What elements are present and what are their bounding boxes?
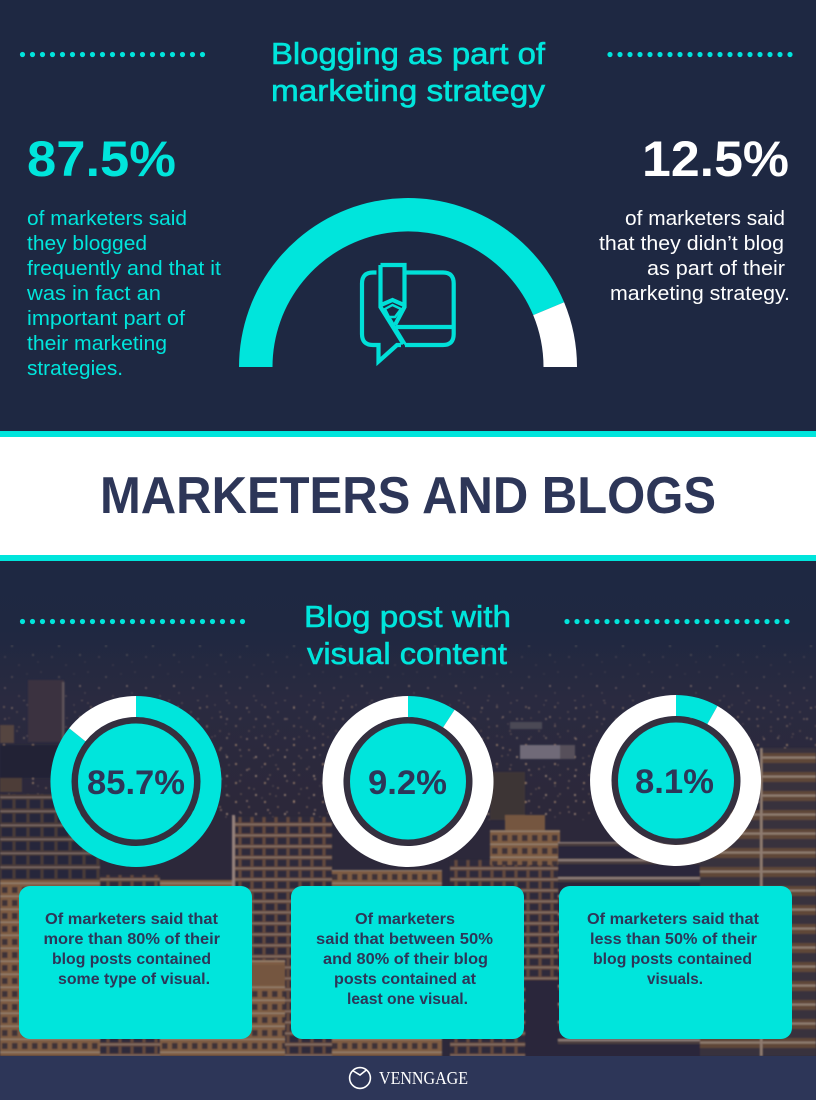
heading: MARKETERS AND BLOGS: MARKETERS AND BLOGS (100, 467, 716, 525)
heading: Blogging as part of marketing strategy (271, 36, 546, 108)
text block: bloggers description: of marketers said (27, 208, 187, 230)
text block: bloggers description (26, 208, 221, 380)
heading: Blogging as part of marketing strategy: marketing strategy (271, 73, 546, 108)
brand name: VENNGAGE (379, 1068, 468, 1088)
text block: non-bloggers description: that they didn’t blog (599, 233, 784, 255)
text block: bloggers description: was in fact an (26, 283, 161, 305)
dotted divider: bottom right (567, 619, 788, 624)
text block: non-bloggers description: of marketers said (625, 208, 785, 230)
statistic: 12.5%: 12.5% (642, 131, 789, 187)
text block: bloggers description: they blogged (27, 233, 147, 255)
dotted divider: top left (22, 52, 203, 57)
chart: donut 9.2% (323, 696, 494, 867)
value: 8.1%: 8.1% (635, 763, 714, 801)
card: less than 50%: Of marketers said that (587, 911, 759, 928)
icon: Venngage logo (350, 1068, 370, 1088)
heading: Blogging as part of marketing strategy: Blogging as part of (271, 36, 545, 71)
chart: donut 8.1% (590, 695, 761, 866)
card: between 50% and 80% (291, 886, 524, 1039)
text block: non-bloggers description: marketing strategy. (610, 283, 790, 305)
chart: semicircle gauge 87.5 / 12.5 (239, 198, 577, 367)
text block: bloggers description: frequently and that it (27, 258, 221, 280)
card: less than 50% (559, 886, 792, 1039)
card: between 50% and 80%: said that between 50% (316, 931, 493, 948)
card: between 50% and 80%: posts contained at (334, 971, 476, 988)
background: night city skyline (0, 561, 816, 1056)
card: between 50% and 80%: and 80% of their blog (323, 951, 488, 968)
text block: non-bloggers description (599, 208, 790, 305)
card: between 50% and 80%: Of marketers (355, 911, 455, 928)
top panel background (0, 0, 816, 432)
dotted divider: top right (610, 52, 791, 57)
heading: Blog post with visual content (304, 599, 511, 671)
card: more than 80%: blog posts contained (52, 951, 211, 968)
heading: Blog post with visual content: Blog post with (304, 599, 511, 634)
value: 85.7%: 85.7% (87, 764, 185, 802)
card: between 50% and 80%: least one visual. (347, 991, 468, 1008)
text block: non-bloggers description: as part of their (647, 258, 785, 280)
band: white title strip with teal rules (0, 431, 816, 561)
card: less than 50%: blog posts contained (593, 951, 752, 968)
text block: bloggers description: strategies. (27, 358, 123, 380)
icon: pencil and speech bubble (362, 265, 454, 362)
card: less than 50%: visuals. (647, 971, 703, 988)
card: more than 80%: more than 80% of their (44, 931, 220, 948)
card: more than 80% (19, 886, 252, 1039)
card: less than 50%: less than 50% of their (590, 931, 757, 948)
footer bar (0, 1056, 816, 1100)
text block: bloggers description: their marketing (27, 333, 167, 355)
text block: bloggers description: important part of (27, 308, 185, 330)
statistic: 87.5%: 87.5% (27, 131, 176, 187)
dotted divider: bottom left (22, 619, 243, 624)
value: 9.2%: 9.2% (368, 764, 447, 802)
heading: Blog post with visual content: visual content (307, 636, 507, 671)
card: more than 80%: some type of visual. (58, 971, 210, 988)
chart: donut 85.7% (50, 696, 221, 867)
card: more than 80%: Of marketers said that (45, 911, 218, 928)
